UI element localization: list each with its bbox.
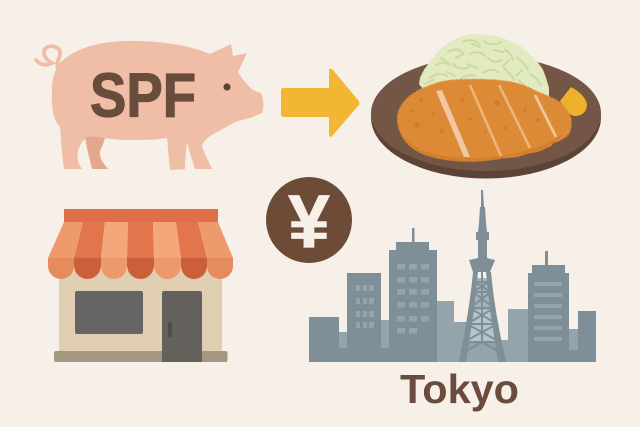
cutlet slice cuts [436,90,470,157]
cutlet lower shading [400,128,563,161]
windows: tall building [397,264,429,334]
background buildings [339,301,578,362]
SPF label: SPF [90,62,196,130]
plate [371,56,601,178]
arrow [281,69,360,137]
Tokyo skyline [309,190,596,412]
windows: left building [356,285,374,328]
windows: right building [534,282,562,341]
foreground buildings [309,228,596,362]
pig tail [36,46,60,68]
icon: shop [48,209,233,362]
shop door [162,291,202,362]
lemon wedge [560,87,587,116]
cutlet crumbs [410,98,540,134]
Tokyo label: Tokyo [400,366,519,412]
icon: tonkatsu plate [371,35,601,178]
shredded cabbage [420,35,548,100]
pig body [52,41,263,170]
icon: yen coin: ¥ [288,179,330,263]
icon: yen coin [266,177,352,263]
shop base [54,351,228,362]
shop wall [59,270,222,354]
pig far leg [85,137,108,169]
cutlet [398,80,571,161]
shop awning [48,209,233,279]
icon: SPF pig [36,41,263,170]
shop window [75,291,143,334]
radio tower [459,190,506,362]
pig eye [223,83,231,91]
